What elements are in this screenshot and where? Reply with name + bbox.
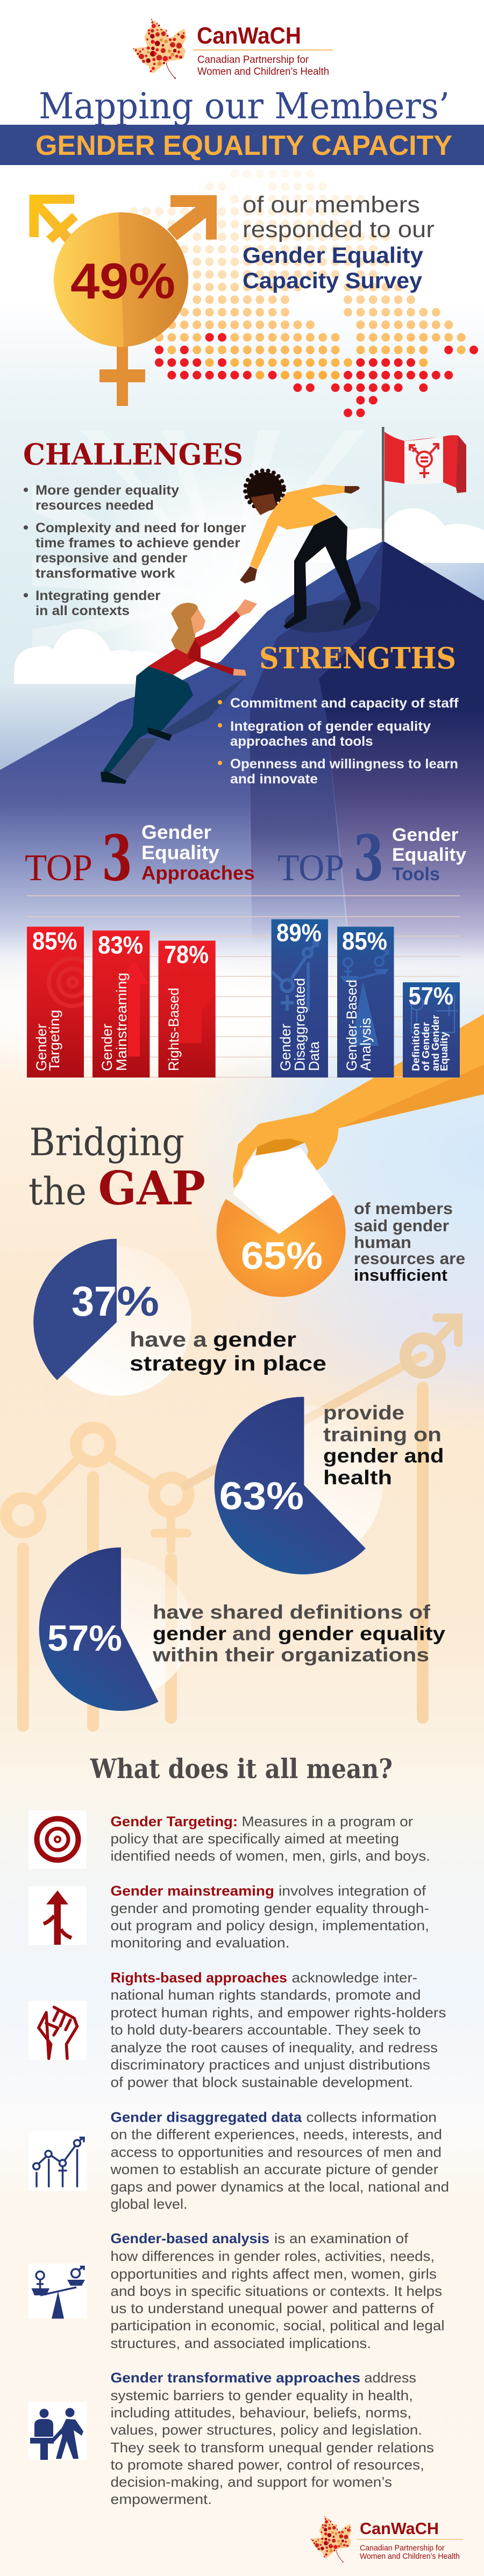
bar: gender mainstreaming 83%: Gender — [99, 1024, 115, 1071]
bar: gender disaggregated data 89%: 89% — [276, 918, 322, 946]
heading: strengths: STRENGTHS — [259, 641, 456, 675]
text: rights-based approaches: acknowledge inter- — [291, 1970, 417, 1986]
icon: target — [29, 1810, 87, 1869]
bar: gender disaggregated data 89%: Gender — [277, 1024, 294, 1071]
text: gender disaggregated data: access to opportunities and resources of men and — [111, 2144, 442, 2160]
legs — [283, 515, 361, 629]
rear leg shadow — [110, 738, 159, 780]
icon: gender symbol with 49% — [29, 195, 217, 406]
text: survey response: of our members — [243, 192, 420, 218]
illustration: climber reaching up — [101, 599, 257, 784]
chart: 57% shared definitions pie — [39, 1547, 191, 1711]
text: gender targeting: identified needs of women, men, girls, and boys. — [111, 1848, 430, 1864]
icon: male arrow — [167, 195, 217, 240]
title band: gender equality capacity: GENDER EQUALITY CAPACITY — [35, 130, 452, 161]
text: rights-based approaches: of power that block sustainable development. — [111, 2074, 413, 2090]
illustration: flag on summit — [382, 427, 466, 541]
stat: 65% coin and slip — [217, 1148, 346, 1297]
icon: transgender arrow — [29, 195, 78, 244]
chart: 63% training pie — [215, 1397, 383, 1574]
text: challenges list — [24, 483, 246, 618]
sweater — [250, 484, 345, 569]
heading: top 3 gender equality tools: Tools — [392, 864, 440, 884]
bar: gender-based analysis 85% — [337, 927, 394, 1078]
bar: gender-based analysis 85%: Gender-Based — [344, 980, 360, 1071]
chart: 57% shared definitions pie: 57% — [47, 1618, 122, 1659]
bar: definition of gender and gender equality 57%: 57% — [409, 982, 453, 1010]
text: 37% gender strategy: gender — [213, 1329, 296, 1352]
text: 65% insufficient resources: human — [354, 1233, 411, 1252]
text: gender mainstreaming: monitoring and evaluation. — [111, 1935, 289, 1951]
text: strengths list: Integration of gender equality — [230, 719, 431, 734]
text: gender targeting: Measures in a program or — [242, 1813, 413, 1829]
text: rights-based approaches: discriminatory practices and unjust distributions — [111, 2057, 430, 2073]
illustration: mountain — [0, 541, 484, 968]
trousers — [103, 666, 193, 772]
text: gender disaggregated data: women to establish an accurate picture of gender — [110, 2161, 438, 2178]
bar: gender-based analysis 85%: 85% — [342, 927, 387, 955]
text: gender mainstreaming: Gender mainstreaming — [111, 1883, 274, 1899]
text: 63% training: health — [323, 1467, 392, 1489]
text: 57% shared definitions: gender — [153, 1623, 226, 1644]
bar: rights-based 78% — [158, 940, 216, 1078]
bar: gender mainstreaming 83% — [92, 931, 150, 1078]
logo: CanWaCH footer: CanWaCH — [360, 2519, 439, 2538]
text: survey response — [243, 192, 435, 293]
text: gender transformative approaches: including attitudes, behaviour, beliefs, norms, — [111, 2404, 411, 2421]
text: rights-based approaches: national human rights standards, promote and — [111, 1987, 421, 2003]
bar: definition of gender and gender equality 57% — [403, 982, 460, 1078]
text: gender disaggregated data: collects information — [307, 2109, 437, 2125]
text: challenges list: responsive and gender — [35, 551, 188, 566]
icon watermark: fist — [170, 996, 213, 1043]
title: Mapping our Members’ — [39, 85, 450, 127]
text: strengths list: and innovate — [230, 772, 318, 787]
text: strengths list — [218, 696, 459, 787]
icon watermark: chart — [272, 942, 317, 1011]
icon: raised fist — [29, 2001, 87, 2060]
heading: bridging the gap: GAP — [98, 1161, 205, 1216]
text: gender mainstreaming: involves integration of — [279, 1883, 426, 1899]
bar: definition of gender and gender equality 57%: Equality — [439, 1032, 450, 1071]
text: gender transformative approaches: values, power structures, policy and legislation. — [111, 2422, 422, 2438]
chart: 37% gender strategy pie — [33, 1239, 191, 1396]
hands — [240, 486, 360, 583]
text: gender disaggregated data: global level. — [111, 2196, 187, 2212]
text: gender mainstreaming: out program and policy design, implementation, — [111, 1917, 429, 1933]
bar: rights-based 78%: 78% — [164, 940, 209, 968]
text: gender disaggregated data — [110, 2109, 449, 2212]
text: gender disaggregated data: Gender disaggregated data — [111, 2109, 302, 2125]
icon: merging arrow — [29, 1886, 87, 1945]
background chart of gender symbols — [6, 1318, 458, 1726]
chart: 37% gender strategy pie: 37 — [72, 1278, 117, 1325]
face — [191, 609, 205, 634]
text: gender-based analysis: is an examination of — [274, 2230, 409, 2246]
text: rights-based approaches: to hold duty-bearers accountable. They seek to — [111, 2022, 421, 2038]
text: gender disaggregated data: gaps and power dynamics at the local, national and — [111, 2179, 449, 2195]
heading: what does it all mean: What does it all mean? — [90, 1753, 393, 1785]
stat: 49%: 49% — [70, 253, 175, 309]
arm shading — [339, 1065, 484, 1128]
text: 63% training — [323, 1402, 444, 1489]
bar: definition of gender and gender equality 57%: Definition — [411, 1023, 422, 1071]
text: 37% gender strategy: have a — [130, 1329, 207, 1352]
text: 63% training: gender and — [323, 1445, 444, 1467]
heading: top 3 gender equality tools: Gender — [392, 825, 458, 845]
text: 63% training: training on — [323, 1424, 442, 1446]
text: strengths list: Openness and willingness to learn — [230, 757, 458, 772]
logo: CanWaCH header: CanWaCH — [197, 23, 301, 49]
bar: gender mainstreaming 83%: 83% — [98, 931, 143, 959]
footprint shadow — [283, 595, 380, 638]
heading: top 3 gender equality tools: 3 — [353, 822, 384, 895]
text: gender transformative approaches: empowerment. — [111, 2491, 212, 2507]
illustration: climber helping from above — [240, 470, 380, 638]
icon: two people with table — [29, 2402, 87, 2460]
text: gender mainstreaming — [111, 1883, 429, 1951]
shoes — [101, 727, 172, 784]
logo: CanWaCH header: Women and Children’s Health — [197, 66, 329, 77]
heading: top 3 gender equality tools — [277, 822, 466, 895]
text: challenges list: Integrating gender — [35, 588, 161, 603]
text: 37% gender strategy — [130, 1329, 326, 1375]
icon: transgender symbol on flag — [410, 444, 438, 478]
text: survey response: Gender Equality — [243, 242, 424, 268]
face — [251, 494, 277, 515]
logo: CanWaCH footer: Women and Children’s Health — [360, 2552, 460, 2561]
text: 65% insufficient resources — [354, 1199, 465, 1285]
heading: top 3 gender equality approaches: 3 — [102, 822, 132, 895]
heading: top 3 gender equality approaches: Approaches — [141, 862, 255, 884]
text: gender transformative approaches: Gender transformative approaches — [111, 2370, 360, 2386]
text: strengths list: Commitment and capacity of staff — [230, 696, 459, 711]
text: rights-based approaches: protect human rights, and empower rights-holders — [111, 2004, 446, 2021]
text: gender-based analysis: participation in economic, social, political and legal — [111, 2317, 444, 2334]
arm and hand — [233, 1014, 484, 1190]
text: gender disaggregated data: on the different experiences, needs, interests, and — [111, 2127, 442, 2143]
text: strengths list: approaches and tools — [230, 734, 373, 749]
heading: bridging the gap: Bridging — [29, 1121, 184, 1165]
text: gender-based analysis: and boys in specific situations or contexts. It helps — [111, 2283, 442, 2299]
heading: bridging the gap: the — [29, 1169, 87, 1214]
bar: gender targeting 85%: Gender — [33, 1024, 49, 1071]
chart: 37% gender strategy pie: % — [117, 1278, 159, 1325]
title band: gender equality capacity — [0, 125, 484, 165]
coin left half — [54, 212, 124, 347]
text: gender-based analysis: Gender-based analysis — [111, 2230, 269, 2246]
illustration: orange hand reaching down — [233, 1014, 484, 1190]
text: rights-based approaches: Rights-based approaches — [111, 1970, 287, 1986]
text: 37% gender strategy: strategy in place — [130, 1352, 326, 1375]
fingers — [254, 1139, 305, 1172]
icon watermark: scale — [340, 951, 389, 1046]
logo: CanWaCH header: Canadian Partnership for — [197, 54, 309, 66]
bar: definition of gender and gender equality 57%: of Gender — [421, 1022, 431, 1071]
icon: female cross — [99, 344, 145, 406]
text: 65% insufficient resources: resources are — [354, 1249, 465, 1268]
bar: gender disaggregated data 89%: Disaggregated — [292, 978, 308, 1071]
bar: rights-based 78%: Rights-Based — [166, 988, 182, 1071]
logo: CanWaCH footer — [310, 2516, 463, 2563]
text: gender transformative approaches: address — [364, 2370, 416, 2386]
text: 57% shared definitions — [152, 1601, 445, 1666]
icon: balance scale — [29, 2264, 87, 2318]
icon watermark: target — [47, 957, 84, 1008]
text: challenges list: in all contexts — [35, 603, 130, 618]
text: gender targeting: policy that are specifically aimed at meeting — [111, 1831, 399, 1847]
bar chart grid — [27, 896, 460, 1078]
dotted map of Canada — [134, 174, 474, 413]
bar: gender disaggregated data 89% — [272, 918, 328, 1078]
text: gender-based analysis: us to understand unequal power and patterns of — [111, 2300, 434, 2316]
text: gender transformative approaches: They seek to transform unequal gender relations — [111, 2439, 434, 2456]
arm shadow — [163, 677, 245, 736]
text: challenges list: transformative work — [35, 566, 175, 581]
bar: gender disaggregated data 89%: Data — [306, 1041, 322, 1071]
text: survey response: responded to our — [243, 217, 435, 242]
text: survey response: Capacity Survey — [243, 268, 423, 293]
text: 65% insufficient resources: said gender — [354, 1216, 449, 1235]
hair — [245, 470, 284, 509]
bar: gender targeting 85% — [27, 927, 84, 1078]
text: gender transformative approaches: to promote shared power, control of resources, — [111, 2457, 424, 2473]
bar: gender targeting 85%: Targeting — [46, 1010, 62, 1071]
logo: CanWaCH footer: Canadian Partnership for — [360, 2543, 445, 2553]
bar: gender-based analysis 85%: Analysis — [358, 1018, 374, 1071]
icon watermark: document — [410, 995, 457, 1032]
text: 57% shared definitions: and — [232, 1623, 272, 1644]
text: gender-based analysis: how differences in gender roles, activities, needs, — [111, 2248, 435, 2264]
icon watermark: arrow — [119, 961, 149, 1057]
text: rights-based approaches: analyze the root causes of inequality, and redress — [111, 2039, 438, 2056]
text: gender transformative approaches: decision-making, and support for women’s — [111, 2474, 392, 2490]
text: challenges list: resources needed — [35, 498, 154, 513]
heading: challenges: CHALLENGES — [23, 437, 243, 472]
text: 57% shared definitions: have shared definitions of — [153, 1601, 431, 1623]
heading: top 3 gender equality tools: Equality — [392, 845, 466, 865]
coin right half — [118, 212, 188, 347]
heading: top 3 gender equality approaches — [25, 821, 255, 895]
clouds and horizon — [0, 508, 484, 774]
hair — [171, 603, 198, 654]
text: gender-based analysis: structures, and associated implications. — [111, 2335, 371, 2351]
bar: definition of gender and gender equality 57%: and Gender — [430, 1015, 441, 1071]
text: challenges list: More gender equality — [35, 483, 179, 498]
text: challenges list: time frames to achieve gender — [35, 536, 240, 551]
heading: bridging the gap — [29, 1121, 205, 1216]
icon: gender chart — [29, 2131, 87, 2191]
text: 57% shared definitions: within their organizations — [152, 1644, 429, 1666]
logo: CanWaCH header — [133, 19, 333, 79]
heading: top 3 gender equality approaches: Equality — [141, 841, 219, 864]
text: gender-based analysis: opportunities and rights affect men, women, girls — [111, 2266, 437, 2282]
bar: gender mainstreaming 83%: Mainstreaming — [113, 973, 130, 1071]
text: 63% training: provide — [323, 1402, 404, 1424]
shirt and arms — [148, 611, 240, 675]
heading: top 3 gender equality tools: TOP — [277, 847, 344, 889]
text: 65% insufficient resources: insufficient — [354, 1266, 447, 1285]
text: gender-based analysis — [111, 2230, 444, 2351]
hands — [233, 599, 257, 676]
bar: gender targeting 85%: 85% — [32, 927, 77, 955]
heading: top 3 gender equality approaches: Gender — [141, 821, 211, 843]
heading: top 3 gender equality approaches: TOP — [25, 847, 92, 889]
text: 57% shared definitions: gender equality — [278, 1623, 445, 1644]
text: gender targeting — [111, 1813, 430, 1864]
chart: 63% training pie: 63% — [219, 1475, 304, 1518]
text: challenges list: Complexity and need for longer — [35, 520, 246, 536]
text: gender transformative approaches: systemic barriers to gender equality in health, — [111, 2387, 413, 2403]
text: 65% insufficient resources: of members — [354, 1199, 453, 1218]
text: gender transformative approaches — [111, 2370, 434, 2507]
text: rights-based approaches — [111, 1970, 446, 2090]
text: gender mainstreaming: gender and promoting gender equality through- — [111, 1900, 429, 1916]
stat: 65% coin and slip: 65% — [241, 1235, 323, 1278]
text: gender targeting: Gender Targeting: — [111, 1813, 238, 1829]
